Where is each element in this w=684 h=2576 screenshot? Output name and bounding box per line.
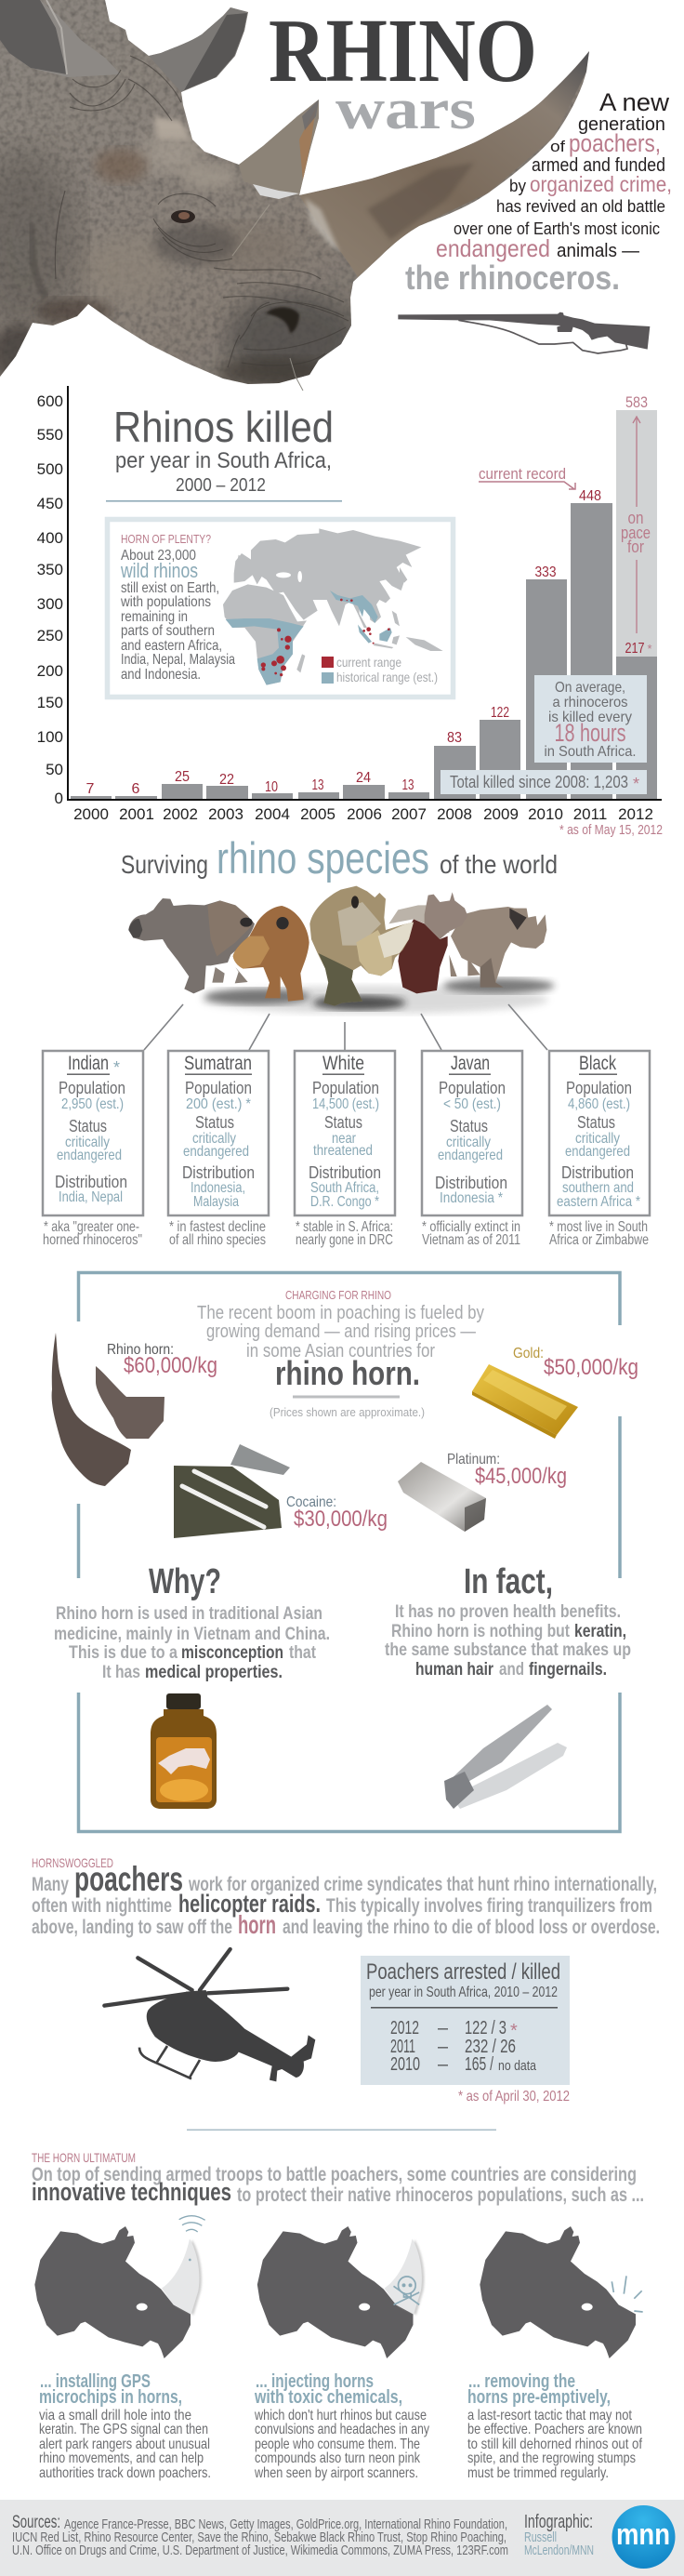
near ear: [33, 1, 121, 77]
value labels: 22: [219, 772, 234, 788]
value labels: 122: [491, 705, 509, 721]
note: Sumatran: of all rhino species: [169, 1232, 266, 1248]
main horn: [299, 51, 589, 277]
technique: GPS: microchips in horns,: [39, 2387, 182, 2408]
value labels: *: [647, 642, 652, 656]
note: Black: * most live in South: [549, 1219, 648, 1235]
axes: [68, 386, 662, 800]
text: in fact: and: [499, 1660, 524, 1680]
text: in fact: human hair: [415, 1660, 493, 1680]
x axis labels: 2002: [163, 805, 198, 823]
sources: Agence France-Presse, BBC News, Getty Images, GoldPrice.org, International Rhino Foundation,: [64, 2516, 507, 2532]
panel: poachers arrested / killed: 165 /: [465, 2054, 493, 2075]
panel: White: South Africa,: [310, 1180, 379, 1196]
technique: GPS: keratin. The GPS signal can then: [39, 2422, 208, 2437]
text: why: medicine, mainly in Vietnam and China.: [54, 1625, 330, 1644]
y axis labels: 450: [37, 495, 63, 512]
value labels: 13: [401, 777, 414, 793]
panel: poachers arrested / killed: —: [438, 2018, 448, 2038]
value labels: 583: [625, 393, 648, 411]
heading: surviving rhino species: [121, 833, 558, 883]
credit: McLendon/MNN: [524, 2543, 594, 2558]
rhino: Indian: [128, 898, 255, 993]
text: the horn ultimatum: THE HORN ULTIMATUM: [32, 2150, 136, 2165]
callout: every 18 hours: [534, 675, 647, 763]
value labels: 10: [265, 779, 278, 795]
nostril: [266, 307, 299, 333]
text: why: It has: [102, 1663, 140, 1682]
intro text block: by: [509, 177, 526, 195]
technique: toxic chemicals: convulsions and headaches in any: [255, 2422, 429, 2437]
value labels: 13: [312, 777, 324, 793]
chart title: per year in South Africa,: [115, 448, 332, 473]
text: horn of plenty: with populations: [120, 594, 211, 610]
value labels: 333: [535, 564, 557, 580]
sources: U.N. Office on Drugs and Crime, U.S. Department of Justice, Wikimedia Commons, ZUMA Press, 123RF.com: [12, 2543, 508, 2558]
section: charging for rhino intro: growing demand — and rising prices —: [206, 1321, 476, 1342]
panel: poachers arrested / killed: 2012: [390, 2018, 419, 2038]
logo: mnn: mnn: [616, 2517, 670, 2551]
note: Indian: horned rhinoceros": [43, 1232, 142, 1248]
panel: poachers arrested / killed: no data: [498, 2058, 537, 2074]
logo: mnn: [612, 2505, 675, 2569]
intro text block: A new: [599, 88, 669, 116]
technique: toxic chemicals: with toxic chemicals,: [254, 2387, 402, 2408]
image: cocaine on mirror: [174, 1444, 290, 1538]
callout: every 18 hours: is killed every: [548, 710, 632, 725]
panel: Indian: *: [113, 1058, 120, 1077]
forehead light: [153, 116, 191, 139]
text: horn of plenty: parts of southern: [121, 623, 215, 639]
text: in fact: It has no proven health benefits.: [395, 1602, 621, 1622]
text: why: Why?: [149, 1562, 221, 1601]
intro text block: poachers,: [569, 129, 661, 157]
sources: Sources:: [12, 2513, 60, 2532]
panel: Indian: critically: [65, 1135, 110, 1150]
y axis labels: 250: [37, 627, 63, 644]
title: wars: wars: [335, 78, 476, 141]
section: charging for rhino intro: The recent boom in poaching is fueled by: [197, 1303, 484, 1323]
panel: Indian: endangered: [57, 1148, 122, 1163]
price: cocaine: [286, 1494, 388, 1532]
panel: poachers arrested / killed: —: [438, 2037, 448, 2057]
y axis labels: 550: [37, 426, 63, 444]
x axis labels: 2011: [573, 805, 607, 823]
panel: Indian: Indian: [68, 1053, 109, 1074]
technique: toxic chemicals: [254, 2371, 429, 2481]
footer: [0, 2500, 684, 2576]
rhino: Sumatran: [233, 906, 309, 1002]
image: rhino horns: [52, 1333, 164, 1486]
image: medicine bottle: [151, 1693, 217, 1809]
technique: removing horns: horns pre-emptively,: [467, 2387, 611, 2408]
panel: poachers arrested / killed: 2011: [390, 2037, 415, 2057]
illustration: five rhino species: [128, 886, 555, 1014]
intro text block: of: [550, 138, 565, 155]
text: in fact: [385, 1562, 631, 1680]
panel: Sumatran: [168, 1051, 269, 1215]
panel: Sumatran: Sumatran: [184, 1053, 252, 1074]
panel: Indian: [43, 1051, 143, 1215]
callout: every 18 hours: in South Africa.: [545, 744, 636, 760]
small horn: [239, 100, 319, 195]
intro text block: the rhinoceros.: [405, 259, 620, 297]
intro text block: animals —: [557, 241, 639, 261]
panel: White: threatened: [313, 1143, 373, 1159]
panel: White: White: [322, 1053, 364, 1074]
y axis labels: 400: [37, 529, 63, 547]
panel: Sumatran: 200 (est.) *: [186, 1096, 251, 1112]
technique: toxic chemicals: compounds also turn neon pink: [255, 2450, 421, 2466]
intro text block: organized crime,: [530, 172, 672, 196]
panel: Black: 4,860 (est.): [568, 1096, 630, 1112]
panel: poachers arrested / killed: 2010: [390, 2054, 420, 2075]
intro text block: endangered: [436, 234, 550, 262]
text: in fact: fingernails.: [529, 1660, 607, 1680]
heading: surviving rhino species: Surviving: [121, 850, 208, 879]
technique: removing horns: must be trimmed regularly.: [467, 2465, 609, 2481]
value labels: 6: [132, 781, 140, 797]
callout: total killed: Total killed since 2008: 1,203: [450, 773, 628, 791]
panel: poachers arrested / killed: per year in South Africa, 2010 – 2012: [369, 1985, 558, 2000]
section: charging for rhino intro: CHARGING FOR RHINO: [285, 1288, 391, 1302]
panel: poachers arrested / killed: [361, 1956, 570, 2085]
text: hornswoggled: Many: [32, 1874, 69, 1895]
note: White: * stable in S. Africa:: [296, 1219, 393, 1235]
x axis labels: 2009: [483, 805, 519, 823]
panel: Black: critically: [575, 1131, 620, 1147]
text: horn of plenty: wild rhinos: [120, 559, 198, 582]
callout: every 18 hours: On average,: [555, 680, 625, 696]
arrow: on pace for: for: [627, 538, 644, 556]
panel: Javan: Indonesia *: [440, 1190, 503, 1206]
panel: Indian: Status: [69, 1117, 107, 1135]
image: platinum bar: [398, 1462, 486, 1532]
y axis labels: 150: [37, 694, 63, 711]
panel: poachers arrested / killed: —: [438, 2054, 448, 2075]
technique: toxic chemicals: ... injecting horns: [256, 2371, 374, 2392]
panel: White: near: [332, 1131, 357, 1147]
technique: toxic chemicals: people who consume them. The: [255, 2437, 420, 2452]
technique: removing horns: a last-resort tactic that may not: [467, 2408, 632, 2423]
text: why: [54, 1562, 330, 1682]
y axis labels: 100: [37, 728, 63, 746]
panel: Sumatran: Indonesia,: [191, 1180, 245, 1196]
note: Sumatran: [169, 1219, 266, 1248]
panel: Black: endangered: [565, 1144, 630, 1160]
text: the horn ultimatum: [32, 2150, 644, 2206]
technique: removing horns: [467, 2371, 642, 2481]
text: hornswoggled: poachers: [74, 1860, 183, 1898]
chart title: Rhinos killed: [113, 403, 334, 451]
panel: Javan: endangered: [438, 1148, 503, 1163]
y axis labels: 200: [37, 662, 63, 680]
callout: every 18 hours: 18 hours: [554, 719, 626, 747]
legend: historical range (est.): [336, 670, 438, 684]
text: horn of plenty: still exist on Earth,: [121, 580, 219, 596]
panel: Black: Population: [566, 1079, 632, 1097]
text: in fact: the same substance that makes up: [385, 1640, 631, 1660]
icon: helicopter: [104, 1949, 315, 2081]
text: horn of plenty: remaining in: [121, 609, 188, 625]
price: cocaine: Cocaine:: [286, 1494, 336, 1510]
note: Indian: [43, 1219, 142, 1248]
note: Javan: [422, 1219, 520, 1248]
price: platinum: [447, 1452, 567, 1489]
note: White: [296, 1219, 393, 1248]
value labels: 7: [86, 781, 95, 797]
bars: [71, 410, 657, 800]
text: hornswoggled: [32, 1855, 660, 1939]
text: in fact: Rhino horn is nothing but: [391, 1622, 571, 1641]
x axis labels: 2001: [119, 805, 154, 823]
panel: White: Population: [312, 1079, 379, 1097]
icon: rifle: [398, 312, 650, 353]
section: charging for rhino intro: in some Asian countries for: [246, 1341, 435, 1361]
chart title: [106, 403, 342, 502]
panel: poachers arrested / killed: Poachers arrested / killed: [366, 1959, 560, 1985]
image: nail clipper: [444, 1705, 567, 1809]
legend: [322, 655, 438, 684]
intro text block: over one of Earth's most iconic: [454, 219, 660, 238]
callout: current record: current record: [479, 465, 566, 483]
text: why: medical properties.: [145, 1663, 283, 1682]
text: why: that: [289, 1643, 317, 1663]
text: why: This is due to a: [69, 1643, 178, 1663]
value labels: 25: [175, 769, 190, 785]
panel: Javan: Distribution: [435, 1174, 507, 1192]
shadow side: [0, 149, 79, 335]
text: in fact: In fact,: [464, 1562, 553, 1601]
credit: [524, 2512, 594, 2558]
text: horn of plenty: and eastern Africa,: [121, 638, 222, 654]
heading: surviving rhino species: rhino species: [217, 833, 429, 883]
footnote: april 30: * as of April 30, 2012: [458, 2089, 570, 2105]
panel: Javan: critically: [446, 1135, 491, 1150]
far ear: [149, 7, 248, 92]
x axis labels: [73, 805, 653, 823]
frame: charging for rhino panel: [78, 1272, 620, 1832]
callout: total killed: *: [633, 775, 639, 793]
credit: Russell: [524, 2530, 557, 2545]
panel: Black: eastern Africa *: [557, 1194, 640, 1210]
arrow: on pace for: [621, 417, 651, 633]
value labels: [86, 393, 652, 797]
technique: removing horns: be effective. Poachers are known: [467, 2422, 642, 2437]
sources: IUCN Red List, Rhino Resource Center, Save the Rhino, Sebakwe Black Rhino Trust, Stop Rhino Poaching,: [12, 2530, 506, 2545]
callout: total killed: [441, 770, 647, 794]
icon: rhino with GPS horn: [34, 2216, 205, 2358]
panel: Sumatran: critically: [192, 1131, 236, 1147]
chart title: 2000 – 2012: [176, 475, 266, 496]
panel: Black: southern and: [562, 1180, 634, 1196]
panel: Sumatran: Population: [185, 1079, 252, 1097]
panel: poachers arrested / killed: *: [510, 2021, 518, 2041]
callout: every 18 hours: a rhinoceros: [552, 695, 628, 710]
x axis labels: 2010: [528, 805, 563, 823]
technique: GPS: ... installing GPS: [40, 2371, 151, 2392]
text: horn of plenty: [120, 532, 235, 683]
intro text block: armed and funded: [532, 155, 665, 176]
panel: Indian: 2,950 (est.): [61, 1096, 124, 1112]
text: hornswoggled: often with nighttime: [32, 1895, 172, 1917]
panel: Sumatran: Status: [195, 1113, 234, 1132]
technique: toxic chemicals: which don't hurt rhinos but cause: [254, 2408, 427, 2423]
panel: White: Status: [324, 1113, 362, 1132]
x axis labels: 2008: [437, 805, 472, 823]
panel: Indian: Distribution: [55, 1173, 127, 1191]
arrow: on pace for: on: [628, 509, 643, 527]
panel: Javan: < 50 (est.): [443, 1096, 501, 1112]
value labels: 448: [579, 488, 601, 504]
x axis labels: 2007: [391, 805, 427, 823]
x axis labels: 2005: [300, 805, 335, 823]
intro text block: generation: [578, 114, 665, 135]
panel: Indian: India, Nepal: [59, 1189, 123, 1205]
price: rhino horn: Rhino horn:: [107, 1342, 174, 1358]
value labels: 217: [625, 641, 645, 657]
price: gold: $50,000/kg: [544, 1355, 638, 1380]
rhino: Black: [449, 907, 546, 988]
technique: GPS: authorities track down poachers.: [39, 2465, 211, 2481]
icon: rhino with toxic horn: [257, 2226, 425, 2358]
text: why: misconception: [181, 1643, 283, 1663]
intro text block: [405, 88, 672, 297]
panel: Javan: Status: [450, 1117, 488, 1135]
technique: toxic chemicals: when seen by airport scanners.: [254, 2465, 418, 2481]
technique: GPS: [39, 2371, 211, 2481]
panel: White: Distribution: [309, 1163, 381, 1182]
wrinkles: [55, 56, 349, 367]
price: gold: Gold:: [513, 1346, 544, 1361]
y axis labels: 500: [37, 460, 63, 478]
technique: GPS: alert park rangers about unusual: [39, 2437, 210, 2452]
x axis labels: 2012: [618, 805, 653, 823]
y axis labels: 0: [55, 790, 63, 807]
note: Indian: * aka "greater one-: [44, 1219, 139, 1235]
text: hornswoggled: helicopter raids.: [178, 1890, 321, 1918]
text: in fact: keratin,: [574, 1622, 626, 1641]
text: hornswoggled: above, landing to saw off the: [32, 1917, 232, 1938]
muzzle: [228, 293, 358, 386]
intro text block: has revived an old battle: [496, 197, 665, 216]
technique: removing horns: to still kill dehorned rhinos out of: [467, 2437, 642, 2452]
panel: Sumatran: Distribution: [182, 1163, 255, 1182]
value labels: 83: [447, 730, 462, 746]
map: range of rhinos: [223, 528, 443, 685]
note: Black: [549, 1219, 649, 1248]
x axis labels: 2006: [347, 805, 382, 823]
panel: White: [295, 1051, 395, 1215]
section: charging for rhino intro: rhino horn.: [275, 1354, 420, 1392]
text: the horn ultimatum: innovative techniques: [32, 2178, 231, 2206]
text: horn of plenty: HORN OF PLENTY?: [121, 532, 211, 546]
text: hornswoggled: horn: [238, 1910, 276, 1939]
text: hornswoggled: HORNSWOGGLED: [32, 1855, 113, 1870]
value labels: 24: [356, 770, 371, 786]
price: gold: [513, 1346, 638, 1380]
y axis labels: 600: [37, 392, 63, 410]
credit: Infographic:: [524, 2512, 593, 2532]
whisker: [290, 358, 303, 391]
note: Javan: Vietnam as of 2011: [422, 1232, 520, 1248]
price: rhino horn: $60,000/kg: [124, 1353, 217, 1378]
section: charging for rhino intro: (Prices shown are approximate.): [270, 1405, 425, 1419]
panel: poachers arrested / killed: 122 / 3: [465, 2018, 506, 2038]
chart: rhinos killed per year: [37, 386, 663, 838]
panel: Javan: Javan: [451, 1053, 490, 1074]
sources: [12, 2513, 508, 2558]
footnote: * as of May 15, 2012: [559, 822, 663, 838]
y axis labels: 300: [37, 595, 63, 613]
price: platinum: $45,000/kg: [475, 1464, 567, 1489]
rhino: White: [309, 886, 414, 1006]
technique: removing horns: ... removing the: [468, 2371, 575, 2392]
panel: poachers arrested / killed: 232 / 26: [465, 2037, 516, 2057]
panel: White: D.R. Congo *: [310, 1194, 379, 1210]
panel: Javan: Population: [439, 1079, 506, 1097]
note: Black: Africa or Zimbabwe: [549, 1232, 649, 1248]
rhino: Javan: [388, 892, 467, 993]
heading: surviving rhino species: of the world: [440, 850, 558, 879]
price: rhino horn: [107, 1342, 217, 1378]
panel: Sumatran: Malaysia: [193, 1194, 239, 1210]
hero: rhino head photo: [0, 0, 589, 391]
x axis labels: 2000: [73, 805, 109, 823]
neck fold shadow: [32, 223, 46, 298]
legend: current range: [336, 655, 401, 670]
text: why: Rhino horn is used in traditional Asian: [56, 1604, 322, 1624]
note: Javan: * officially extinct in: [422, 1219, 520, 1235]
icon: rhino with horn removed: [480, 2226, 643, 2358]
title: RHINO: RHINO: [269, 1, 537, 100]
note: Sumatran: * in fastest decline: [169, 1219, 266, 1235]
y axis labels: [37, 392, 63, 807]
y axis labels: 350: [37, 561, 63, 578]
text: horn of plenty: and Indonesia.: [121, 667, 201, 683]
arrow: on pace for: pace: [621, 524, 651, 542]
panel: Sumatran: endangered: [183, 1144, 249, 1160]
technique: GPS: via a small drill hole into the: [39, 2408, 191, 2423]
note: White: nearly gone in DRC: [296, 1232, 393, 1248]
technique: removing horns: spite, and the regrowing stumps: [467, 2450, 636, 2466]
y axis labels: 50: [46, 761, 63, 778]
x axis labels: 2004: [255, 805, 290, 823]
panel: Black: Distribution: [561, 1163, 634, 1182]
panel: Black: Black: [579, 1053, 616, 1074]
image: gold bar: [472, 1364, 578, 1439]
panel: Javan: [422, 1051, 522, 1215]
panel: White: 14,500 (est.): [312, 1096, 379, 1112]
panel: Black: [549, 1051, 650, 1215]
panel: Indian: Population: [59, 1079, 125, 1097]
price: platinum: Platinum:: [447, 1452, 500, 1467]
x axis labels: 2003: [208, 805, 243, 823]
panel: horn of plenty map: [108, 519, 454, 697]
price: cocaine: $30,000/kg: [294, 1507, 388, 1532]
panel: Black: Status: [577, 1113, 615, 1132]
text: horn of plenty: India, Nepal, Malaysia: [121, 652, 235, 668]
text: horn of plenty: About 23,000: [121, 548, 196, 564]
section: charging for rhino intro: [197, 1288, 484, 1419]
technique: GPS: rhino movements, and can help: [39, 2450, 204, 2466]
eye: [171, 210, 195, 223]
connector lines: [144, 1004, 547, 1050]
